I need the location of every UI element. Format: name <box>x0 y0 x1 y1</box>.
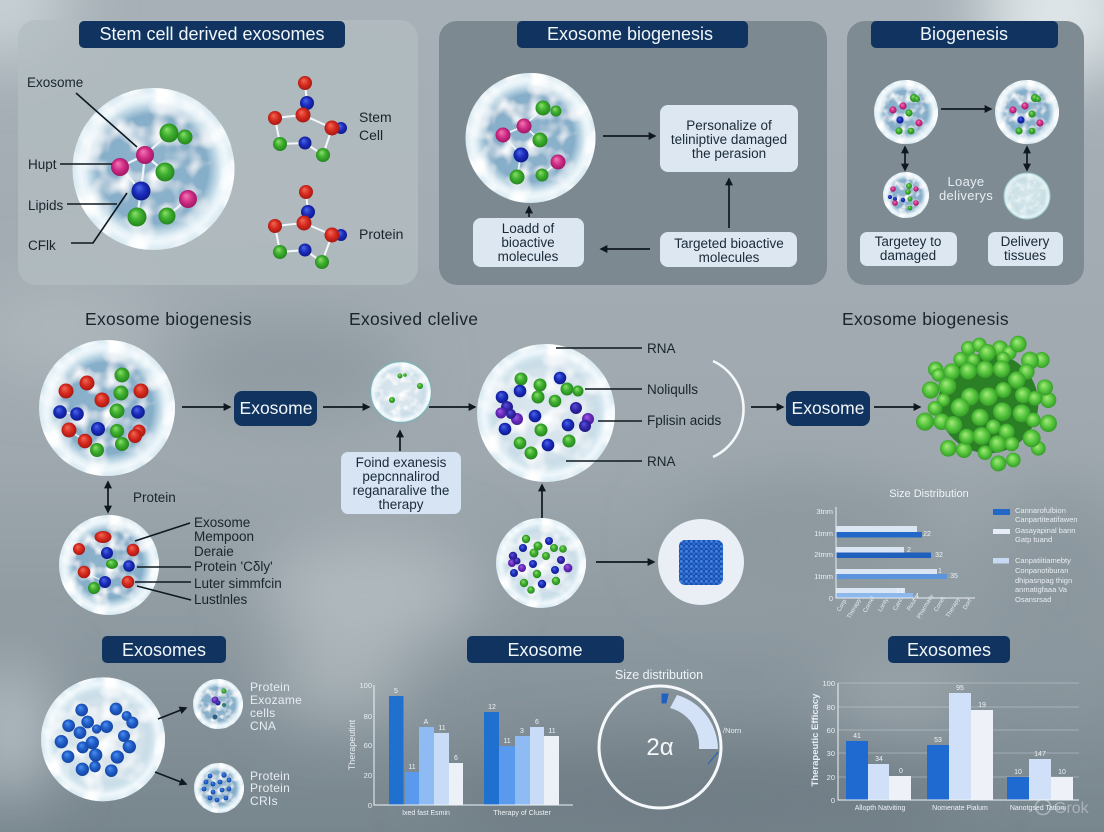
flow arrows <box>529 136 729 249</box>
small cell with mixed molecules <box>883 172 929 218</box>
callout labels: RNA <box>647 341 676 356</box>
label: stem cell: Cell <box>359 127 383 143</box>
value labels: 2 <box>907 547 911 554</box>
box: found exanesis: therapy <box>378 497 424 512</box>
callout labels <box>647 341 722 469</box>
cell labels: CFlk <box>28 238 56 253</box>
value labels: 11 <box>503 738 511 745</box>
value labels: 35 <box>950 573 958 580</box>
callout labels: Deraie <box>194 544 234 559</box>
molecule: stem cell <box>268 76 347 162</box>
value labels: 0 <box>899 768 903 775</box>
value labels: 22 <box>923 531 931 538</box>
panel: biogenesis <box>847 21 1084 285</box>
label: loaye deliverys: deliverys <box>939 188 993 203</box>
x-axis tick labels: Rout <box>907 598 918 612</box>
box: delivery tissues <box>988 232 1063 266</box>
cell left <box>874 80 938 144</box>
value labels <box>394 688 556 771</box>
exosome cell with molecules <box>72 88 234 250</box>
labels upper: Protein <box>250 680 290 694</box>
bars <box>836 526 947 598</box>
small cell <box>370 361 432 423</box>
callout labels: Noliqulls <box>647 382 698 397</box>
chart: therapeutic grouped bars center <box>347 681 573 817</box>
callout labels: Lustlnles <box>194 592 248 607</box>
panel: stem cell derived exosomes <box>18 20 418 285</box>
pale small cell <box>1004 173 1050 219</box>
wedge <box>670 695 718 749</box>
bars group 1 <box>389 696 463 805</box>
value labels: 53 <box>934 737 942 744</box>
y-axis ticks: 30 <box>827 749 835 758</box>
legend: Canpartiteatifawen <box>1015 515 1078 524</box>
callout labels: Protein 'Cδly' <box>194 559 273 574</box>
callout labels: Mempoon <box>194 529 254 544</box>
arrow up <box>541 485 543 518</box>
axes <box>836 507 975 598</box>
green molecular cluster <box>916 336 1057 471</box>
callout lines <box>60 93 137 243</box>
box: personalize: Personalize of <box>686 118 772 133</box>
box: delivery tissues: Delivery <box>1001 234 1050 249</box>
arrow to upper small cell <box>158 708 186 719</box>
box: targeted bioactive molecules <box>660 232 797 267</box>
heading: exosome biogenesis right: Exosome biogenesis <box>842 309 1009 329</box>
x-axis tick labels: Lanty <box>878 597 890 613</box>
arrow <box>429 406 475 408</box>
cell labels: Exosome <box>27 75 83 90</box>
value labels: 11 <box>438 725 446 732</box>
axes <box>838 683 1079 800</box>
arrow <box>182 406 230 408</box>
y-axis ticks <box>359 681 372 810</box>
heading: exosomes right: Exosomes <box>907 640 991 660</box>
bars <box>846 693 1073 800</box>
size distribution gauge <box>599 668 741 808</box>
legend: Gasayapinal bann <box>1015 526 1075 535</box>
legend: Osansrsad <box>1015 595 1051 604</box>
box: found exanesis: pepcnnalirod <box>362 469 440 484</box>
double arrow <box>107 482 109 512</box>
box: targeted bioactive molecules: Targeted bioactive <box>674 236 784 251</box>
y-axis ticks: 0 <box>368 801 372 810</box>
value labels <box>853 685 1066 776</box>
heading: stem cell derived exosomes: Stem cell derived exosomes <box>99 24 325 44</box>
legend: Gatp tuand <box>1015 535 1052 544</box>
box: found exanesis: Foind exanesis <box>356 455 447 470</box>
arrow <box>596 561 654 563</box>
y-axis ticks: 0 <box>831 796 835 805</box>
y-axis labels: 1tmm <box>814 529 833 538</box>
arrows <box>905 109 1027 170</box>
pill: exosome <box>234 391 317 426</box>
value labels: 6 <box>535 719 539 726</box>
value labels: 95 <box>956 685 964 692</box>
y-axis labels: 3tnm <box>816 507 833 516</box>
value labels: 10 <box>1058 769 1066 776</box>
arrow <box>751 406 783 408</box>
box: delivery tissues: tissues <box>1004 248 1046 263</box>
arrow to lower small cell <box>155 772 186 784</box>
chart: size distribution horizontal bars <box>814 488 1078 620</box>
cell right <box>995 80 1059 144</box>
callout labels: Luter simmfcin <box>194 576 282 591</box>
heading: exosome biogenesis left: Exosome biogenesis <box>85 309 252 329</box>
heading: exosomes right <box>888 636 1010 663</box>
legend: anmatigfaaa Va <box>1015 585 1068 594</box>
value labels: 4 <box>915 593 919 600</box>
callout labels: RNA <box>647 454 676 469</box>
pill: exosome: Exosome <box>240 398 312 418</box>
value labels: 11 <box>408 764 416 771</box>
y-axis ticks: 100 <box>359 681 372 690</box>
value labels: 11 <box>548 728 556 735</box>
watermark <box>1036 800 1090 817</box>
y-axis ticks: 80 <box>827 703 835 712</box>
label: protein: Protein <box>133 490 176 505</box>
heading: biogenesis <box>871 21 1058 48</box>
cell labels: Lipids <box>28 198 64 213</box>
y-axis labels: 0 <box>829 594 833 603</box>
icon: nanoparticle block <box>658 519 744 605</box>
ring <box>599 686 721 808</box>
small cell upper <box>193 679 243 729</box>
lower exosome with cargo <box>496 518 586 608</box>
labels upper: cells <box>250 706 276 720</box>
arrow <box>323 406 369 408</box>
x-axis labels: Therapy of Cluster <box>493 810 551 817</box>
labels lower: Protein <box>250 781 290 795</box>
x-axis tick labels: Cann <box>893 597 905 612</box>
legend: Canpatiitiamebty <box>1015 556 1071 565</box>
label: protein: Protein <box>359 226 403 242</box>
label: stem cell: Stem <box>359 109 392 125</box>
large exosome with cargo <box>39 340 175 476</box>
x-axis labels <box>402 810 551 817</box>
y-axis labels <box>814 507 833 603</box>
heading: exosome center: Exosome <box>507 640 583 660</box>
box: personalize: teliniptive damaged <box>671 132 787 147</box>
value labels: 32 <box>935 552 943 559</box>
watermark: Grok <box>1054 800 1090 817</box>
box: found exanesis: reganaralive the <box>353 483 449 498</box>
box: targetey to damaged: damaged <box>880 248 936 263</box>
heading: exosived clelive: Exosived clelive <box>349 309 478 329</box>
value labels: 6 <box>454 755 458 762</box>
pill: exosome: Exosome <box>792 398 864 418</box>
pill: exosome <box>786 391 870 426</box>
arrow <box>874 406 920 408</box>
value labels: A <box>424 719 429 726</box>
y-axis ticks: 20 <box>364 771 372 780</box>
y-axis title: Therapeutint <box>347 719 357 770</box>
x-axis labels: Nomenate Pialum <box>932 805 988 812</box>
x-axis tick labels: Pharmacy <box>917 594 935 620</box>
value labels: 34 <box>875 756 883 763</box>
legend <box>993 506 1078 604</box>
x-axis labels: Nanotgsed Tatiom <box>1010 805 1066 812</box>
labels upper: Exozame <box>250 693 302 707</box>
chart title: Size Distribution <box>889 488 969 500</box>
value labels <box>896 531 958 600</box>
x-axis labels <box>855 805 1066 812</box>
box: personalize <box>660 105 798 172</box>
box: targeted bioactive molecules: molecules <box>699 250 760 265</box>
white bracket arc <box>713 361 744 457</box>
molecule: protein <box>268 185 347 269</box>
panel: exosome biogenesis <box>439 21 827 285</box>
x-axis tick labels: Conet <box>934 596 947 613</box>
value labels: 10 <box>1014 769 1022 776</box>
chart: therapeutic efficacy bars right <box>810 679 1079 812</box>
value labels: 12 <box>488 704 496 711</box>
small cell lower <box>194 763 244 813</box>
y-axis title: Therapeutic Efficacy <box>810 693 821 786</box>
box: load of bioactive molecules <box>473 218 584 267</box>
exosome cell <box>466 73 596 203</box>
axes <box>374 685 573 805</box>
callout labels <box>194 515 282 607</box>
legend: Conpanotiburan <box>1015 566 1068 575</box>
heading: biogenesis: Biogenesis <box>920 24 1008 44</box>
callout lines <box>135 523 191 600</box>
box: targetey to damaged: Targetey to <box>875 234 941 249</box>
heading: stem cell derived exosomes <box>79 21 345 48</box>
value labels: 5 <box>394 688 398 695</box>
value labels: 3 <box>520 728 524 735</box>
y-axis ticks: 60 <box>827 726 835 735</box>
callout labels: Exosome <box>194 515 250 530</box>
labels lower: Protein <box>250 769 290 783</box>
heading: exosome biogenesis <box>517 21 748 48</box>
y-axis ticks <box>822 679 835 805</box>
x-axis tick labels: Corp <box>837 598 849 613</box>
box: targetey to damaged <box>860 232 957 266</box>
central exosome with cargo <box>477 344 615 482</box>
legend: Cannarofulbion <box>1015 506 1066 515</box>
box: found exanesis <box>341 452 461 514</box>
value labels: 147 <box>1034 751 1046 758</box>
cell labels: Hupt <box>28 157 57 172</box>
y-axis ticks: 20 <box>827 773 835 782</box>
x-axis tick labels: Therapy <box>847 598 863 620</box>
y-axis labels: 2tmm <box>814 550 833 559</box>
heading: exosome biogenesis: Exosome biogenesis <box>547 24 713 44</box>
value labels: 19 <box>978 702 986 709</box>
x-axis labels: Ixed fast Esmin <box>402 810 450 817</box>
gauge value: 2α <box>646 734 674 761</box>
labels lower: CRIs <box>250 794 278 808</box>
cell labels <box>27 75 83 253</box>
y-axis labels: 1tmm <box>814 572 833 581</box>
x-axis tick labels <box>837 594 974 620</box>
value labels: 21 <box>896 588 904 595</box>
heading: exosomes left: Exosomes <box>122 640 206 660</box>
label: loaye deliverys: Loaye <box>948 174 984 189</box>
y-axis ticks: 100 <box>822 679 835 688</box>
box: load of bioactive molecules: molecules <box>498 249 559 264</box>
small exosome with labelled cargo <box>59 515 159 615</box>
box: load of bioactive molecules: Loadd of <box>502 221 555 236</box>
x-axis tick labels: Cornel <box>863 596 877 614</box>
bars group 2 <box>484 712 559 805</box>
y-axis ticks: 60 <box>364 741 372 750</box>
x-axis tick labels: Dorf <box>963 598 974 611</box>
x-axis labels: Allopth Natviting <box>855 805 905 812</box>
labels upper: CNA <box>250 719 276 733</box>
value labels: 41 <box>853 733 861 740</box>
x-axis tick labels: Therapy <box>946 597 962 619</box>
gauge title: Size distribution <box>615 668 703 682</box>
y-axis ticks: 80 <box>364 712 372 721</box>
callout labels: Fplisin acids <box>647 413 722 428</box>
heading: exosomes left <box>102 636 226 663</box>
large exosome with blue cargo <box>41 677 165 801</box>
grid lines <box>838 683 1079 777</box>
box: personalize: the perasion <box>692 146 766 161</box>
arrow up <box>399 431 401 451</box>
box: load of bioactive molecules: bioactive <box>501 235 555 250</box>
heading: exosome center <box>467 636 624 663</box>
callout lines <box>556 348 642 461</box>
blue marks <box>662 694 718 764</box>
legend: dhipasnpag thign <box>1015 576 1072 585</box>
gauge note: /Norn <box>723 726 741 735</box>
value labels: 1 <box>938 568 942 575</box>
